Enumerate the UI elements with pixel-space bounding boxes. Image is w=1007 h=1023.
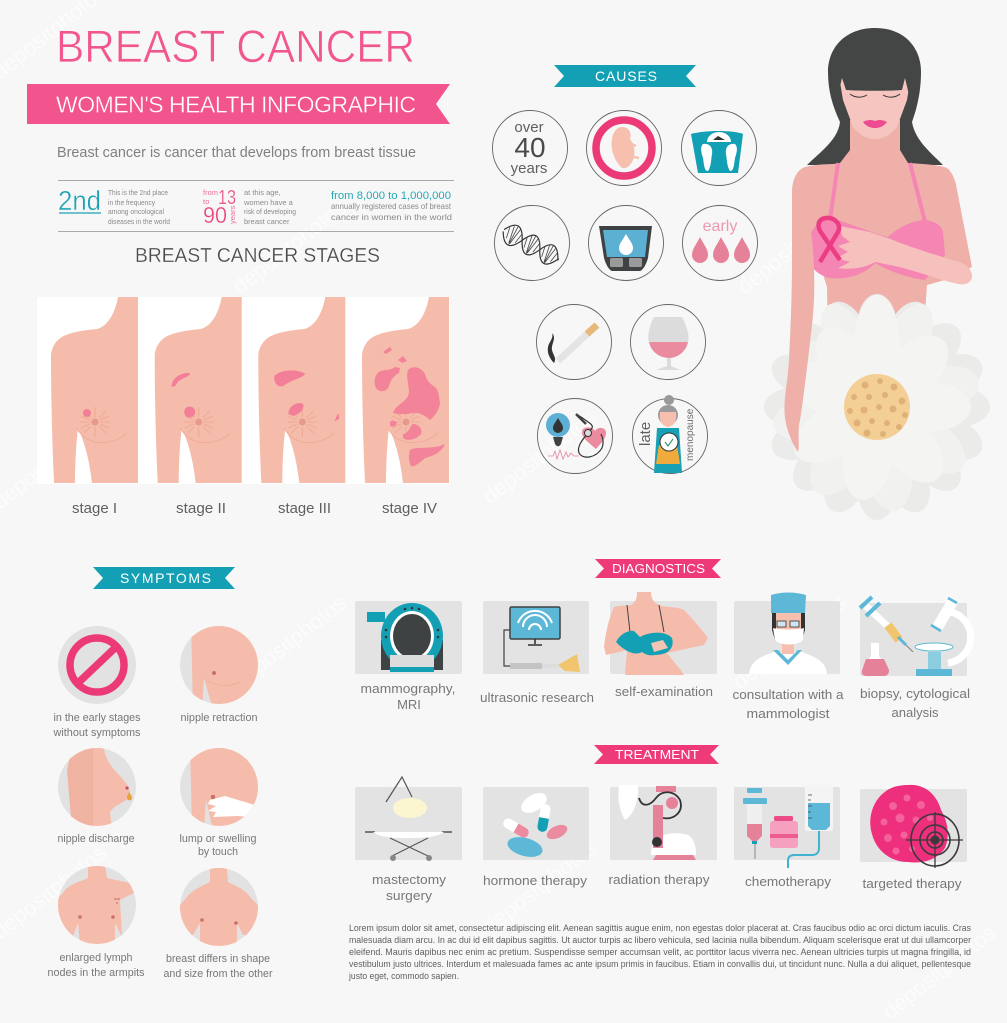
fact: 2nd place: in the frequency — [108, 198, 155, 207]
ribbon: symptoms — [93, 567, 235, 589]
label: enlarged lymph nodes: nodes in the armpits — [48, 967, 145, 979]
card: targeted therapy — [860, 785, 967, 891]
stage labels: stage II — [176, 500, 226, 517]
watermark: depositphotos — [733, 195, 856, 299]
icon: no symptoms — [58, 626, 136, 704]
card: mammography MRI — [355, 601, 462, 712]
card: ultrasonic research — [480, 601, 594, 705]
fact: age range: 90 — [203, 202, 227, 228]
ribbon: diagnostics: DIAGNOSTICS — [612, 561, 705, 576]
fact: age range: at this age, — [244, 188, 281, 197]
label: breast differs — [164, 953, 273, 980]
watermark: depositphotos — [878, 920, 1001, 1023]
panel: treatment — [355, 777, 967, 903]
panel: stages — [37, 297, 450, 484]
daisy — [764, 294, 990, 520]
icon: water drop device — [588, 206, 664, 280]
card: biopsy, cytological analysis: analysis — [892, 705, 939, 720]
stage III illustration — [258, 297, 345, 483]
icon: enlarged lymph nodes — [56, 866, 136, 944]
fact: annual cases: cancer in women in the world — [331, 212, 452, 222]
card: mastectomy surgery — [355, 777, 462, 903]
icon: nipple retraction — [180, 626, 258, 704]
watermark: depositphotos — [228, 195, 351, 299]
fact: 2nd place: This is the 2nd place — [108, 188, 168, 197]
torso — [792, 120, 972, 340]
body text: malesuada diam arcu. In ac dui id elit dapibus sagittis. Ut auctor turpis ac libero vehicula, sed lacinia nulla bibendum. Aliquam scelerisque erat ut dui ullamcorper — [349, 935, 971, 945]
icon: weight scale — [682, 110, 756, 186]
fringe — [835, 48, 915, 95]
card: biopsy, cytological analysis — [860, 597, 971, 720]
stage labels — [72, 500, 437, 517]
fact: age range — [203, 187, 296, 228]
watermark: depositphotos — [228, 590, 351, 694]
bra — [807, 219, 945, 280]
card: consultation with a mammologist: consultation with a — [732, 687, 844, 702]
fact: age range: 13 — [218, 187, 236, 209]
title: BREAST CANCER — [56, 21, 415, 72]
icon: over 40 years — [492, 110, 568, 186]
body text: Lorem ipsum dolor sit amet, consectetur adipiscing elit. Aenean sagittis augue enim, non egestas dolor placerat at. Cras faucibus odio ac orci dictum iaculis. Cras — [349, 923, 972, 933]
card: targeted therapy: targeted therapy — [862, 876, 962, 891]
icon: over 40 years: 40 — [514, 132, 546, 163]
ribbon: causes — [554, 65, 696, 87]
fact: annual cases: annually registered cases of breast — [331, 201, 452, 211]
fact: age range: risk of developing — [244, 207, 296, 216]
icon: wine glass — [630, 304, 706, 380]
icon: cigarette — [536, 304, 612, 380]
fact: 2nd place: among oncological — [108, 207, 164, 216]
icon: late menopause — [632, 395, 708, 474]
banner: women's health infographic — [27, 84, 450, 124]
fact: age range: women have a — [243, 198, 294, 207]
stage labels: stage I — [72, 500, 117, 517]
icon: breast differs — [180, 868, 258, 946]
fact: age range: to — [203, 197, 209, 206]
card: biopsy, cytological analysis: biopsy, cytological — [860, 686, 970, 701]
label: no symptoms — [53, 712, 141, 739]
icon: over 40 years: over — [514, 119, 544, 136]
hanging arm — [784, 190, 814, 452]
body text: vestibulum justo ultrices. Interdum et malesuada fames ac ante ipsum primis in faucibus. Etiam in convallis dui, ut tincidunt nunc. Nulla a dui aliquet, pellentesque — [349, 959, 971, 969]
stage I illustration — [51, 297, 138, 483]
card: consultation with a mammologist: mammologist — [746, 706, 830, 721]
watermark: depositphotos — [728, 590, 851, 694]
icon: early menstruation: early — [703, 218, 737, 235]
card: mammography MRI: mammography, — [360, 681, 456, 696]
card: chemotherapy: chemotherapy — [745, 874, 832, 889]
watermark: depositphotos — [478, 405, 601, 509]
watermark: depositphotos — [478, 835, 601, 939]
body text: eleifend. Mauris dapibus nec enim ac pretium. Suspendisse semper accumsan velit, ac porttitor lacus viverra nec. Aenean ultricies turpis ut magna fringilla, id — [349, 947, 971, 957]
pink awareness ribbon — [819, 218, 840, 262]
bra straps — [830, 163, 925, 222]
ribbon: treatment: TREATMENT — [615, 747, 699, 762]
card: mastectomy surgery: mastectomy — [372, 872, 447, 887]
ribbon: diagnostics — [595, 559, 721, 578]
icon: early menstruation — [682, 206, 758, 280]
facts strip — [58, 180, 454, 232]
ribbon: treatment — [594, 745, 719, 764]
label: no symptoms: in the early stages — [54, 712, 141, 724]
label: no symptoms: without symptoms — [53, 727, 141, 739]
fact: annual cases — [331, 190, 452, 222]
icon: late menopause: late — [637, 422, 654, 446]
lips — [863, 120, 887, 128]
fact: 2nd place — [58, 185, 170, 226]
banner: women's health infographic: WOMEN'S HEALTH INFOGRAPHIC — [56, 92, 416, 118]
heading: breast cancer stages: BREAST CANCER STAGES — [135, 245, 380, 267]
card: hormone therapy: hormone therapy — [483, 873, 588, 888]
icon: late menopause: menopause — [685, 408, 696, 461]
fact: 2nd place: diseases in the world — [108, 217, 170, 226]
face — [838, 70, 912, 139]
card: mastectomy surgery: surgery — [386, 888, 433, 903]
fact: age range: years — [228, 205, 237, 224]
stage labels: stage IV — [382, 500, 437, 517]
stage II illustration — [155, 297, 242, 483]
icon: fetus in ring — [586, 110, 662, 186]
card: radiation therapy: radiation therapy — [608, 872, 710, 887]
intro text: Breast cancer is cancer that develops from breast tissue — [57, 145, 416, 161]
icon: lump by touch — [180, 748, 258, 826]
icon: DNA helix — [494, 206, 570, 280]
stage IV illustration — [362, 297, 449, 483]
stage labels: stage III — [278, 500, 331, 517]
fact: age range: breast cancer — [244, 217, 290, 226]
body text: justo eget, commodo sapien. — [348, 971, 459, 981]
card: hormone therapy — [483, 787, 589, 888]
ribbon: symptoms: SYMPTOMS — [120, 570, 211, 586]
card: ultrasonic research: ultrasonic research — [480, 690, 594, 705]
card: consultation with a mammologist — [732, 592, 844, 721]
ribbon: causes: CAUSES — [595, 68, 657, 84]
label: enlarged lymph nodes — [48, 952, 145, 979]
panel: diagnostics — [355, 592, 971, 721]
body text — [348, 923, 972, 981]
icon: nipple discharge — [58, 748, 136, 828]
label: nipple discharge: nipple discharge — [58, 833, 134, 845]
card: self-examination: self-examination — [615, 684, 713, 699]
card: self-examination — [604, 592, 717, 699]
fact: 2nd place: 2nd — [58, 185, 101, 216]
card: chemotherapy — [734, 785, 840, 889]
label: nipple retraction: nipple retraction — [180, 712, 258, 724]
panel: causes icons — [492, 110, 758, 474]
label: enlarged lymph nodes: enlarged lymph — [60, 952, 132, 964]
forearm and hand — [836, 226, 972, 284]
label: lump or swelling: by touch — [198, 846, 238, 858]
fact: annual cases: from 8,000 to 1,000,000 — [331, 190, 451, 202]
card: radiation therapy — [608, 785, 717, 887]
fact: age range: from — [203, 188, 218, 197]
card: mammography MRI: MRI — [397, 697, 421, 712]
label: lump or swelling — [180, 833, 256, 858]
icon: blood pressure — [538, 398, 612, 474]
woman with ribbon and daisy — [764, 28, 990, 520]
label: breast differs: and size from the other — [164, 968, 273, 980]
closed eyes — [850, 94, 900, 97]
label: breast differs: breast differs in shape — [166, 953, 270, 965]
icon: over 40 years: years — [511, 160, 547, 177]
label: lump or swelling: lump or swelling — [180, 833, 256, 845]
panel: symptoms — [48, 620, 273, 980]
hair — [807, 28, 943, 165]
